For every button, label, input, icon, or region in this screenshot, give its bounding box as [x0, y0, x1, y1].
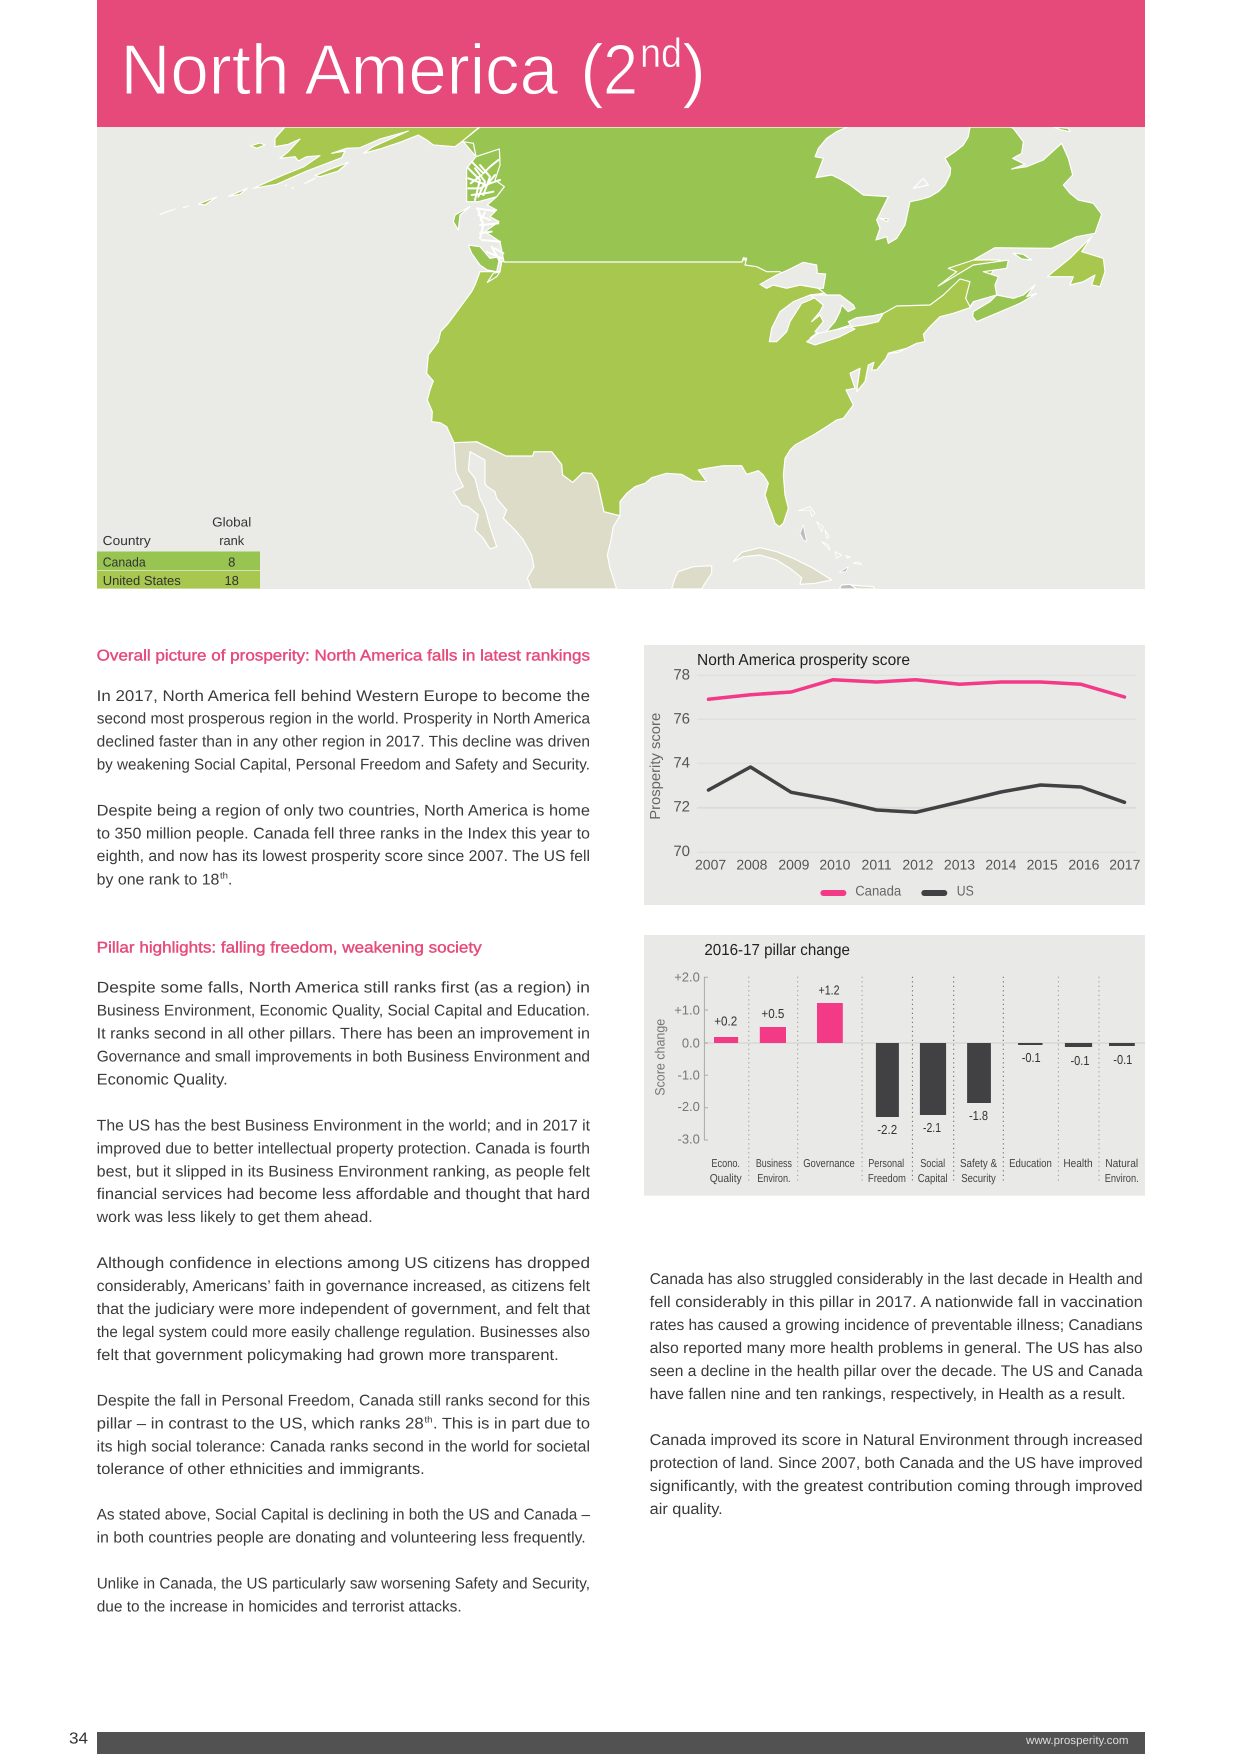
text block: personal freedom: tolerance of other ethnicities and immigrants.	[97, 1461, 425, 1478]
footer bar	[97, 1732, 1145, 1754]
x axis labels: 2012	[902, 856, 934, 872]
map: Yucatan	[672, 566, 712, 589]
text block: pillar highlights: It ranks second in all other pillars. There has been an improvement in	[97, 1026, 590, 1042]
map: Hispaniola west	[839, 584, 857, 589]
text block: governance: felt that government policymaking had grown more transparent.	[97, 1347, 559, 1364]
text block: natural environment	[650, 1432, 1143, 1518]
text block: overall picture: by weakening Social Capital, Personal Freedom and Safety and Security.	[97, 756, 590, 773]
map: Newfoundland	[1047, 237, 1105, 287]
x axis labels: 2017	[1109, 856, 1141, 872]
line: US	[708, 767, 1124, 812]
x axis labels: 2009	[778, 856, 810, 872]
x axis labels	[695, 856, 1141, 872]
y axis labels: 76	[673, 710, 690, 727]
map: Anticosti Island	[1013, 253, 1032, 260]
ranking table	[97, 515, 260, 588]
category labels: Health	[1063, 1158, 1093, 1170]
map: Canada	[461, 127, 1102, 338]
y axis: +1.0	[674, 1003, 700, 1018]
value labels: -0.1	[1113, 1052, 1132, 1067]
map: Alaska panhandle and fjords	[453, 142, 504, 282]
y axis labels: 70	[673, 843, 690, 860]
text block: pillar highlights: best, but it slipped in its Business Environment ranking, as people felt	[97, 1163, 591, 1180]
panel: pillar change bar chart	[644, 935, 1145, 1196]
ranking table: 8	[228, 555, 235, 570]
map: Cuba	[733, 548, 832, 584]
y axis: -3.0	[677, 1132, 700, 1147]
category labels: Safety &	[960, 1158, 997, 1170]
text block: personal freedom	[97, 1392, 590, 1478]
text block: personal freedom: . This is in part due to	[433, 1416, 590, 1432]
text block: pillar highlights: Despite some falls, North America still ranks first (as a region) in	[97, 980, 590, 997]
ranking table: Canada	[103, 555, 146, 570]
text block: health: seen a decline in the health pillar over the decade. The US and Canada	[650, 1363, 1143, 1380]
text block: personal freedom: th	[424, 1414, 432, 1424]
bars: negative	[876, 1043, 1135, 1117]
y axis title: Prosperity score	[648, 713, 664, 820]
category labels: Governance	[803, 1158, 855, 1170]
footer bar: www.prosperity.com	[1025, 1735, 1128, 1747]
map: Baffin tip	[1053, 127, 1070, 132]
text block: pillar highlights: Economic Quality.	[97, 1072, 228, 1088]
text block: overall picture: eighth, and now has its lowest prosperity score since 2007. The US fell	[97, 848, 590, 865]
text block: natural environment: significantly, with the greatest contribution coming through improved	[650, 1478, 1143, 1495]
title: )	[682, 31, 706, 110]
map: Lake Erie	[807, 327, 855, 345]
y axis labels: 74	[673, 755, 690, 772]
map: Lake Michigan	[769, 293, 823, 342]
text block: overall picture: by one rank to 18	[97, 872, 219, 888]
text block: governance: the legal system could more easily challenge regulation. Businesses also	[97, 1324, 590, 1341]
text block: natural environment: protection of land. Since 2007, both Canada and the US have improved	[650, 1455, 1143, 1472]
text block: pillar highlights: The US has the best Business Environment in the world; and in 2017 it	[97, 1117, 591, 1134]
title banner	[97, 0, 1145, 127]
text block: governance	[97, 1255, 591, 1364]
text block: safety and security	[97, 1576, 590, 1616]
text block: overall picture: declined faster than in any other region in 2017. This decline was driven	[97, 733, 590, 750]
map: Lake Ontario	[848, 313, 883, 327]
text block: social capital: in both countries people are donating and volunteering less frequently.	[97, 1530, 586, 1546]
value labels: -1.8	[969, 1108, 988, 1123]
text block: overall picture: second most prosperous region in the world. Prosperity in North America	[97, 711, 590, 728]
category labels: Econo.	[711, 1158, 740, 1170]
y axis labels	[673, 666, 690, 860]
text block: natural environment: air quality.	[650, 1501, 723, 1518]
y axis: -2.0	[677, 1099, 700, 1114]
heading: overall picture: Overall picture of prosperity: North America falls in latest rankings	[97, 648, 590, 665]
map: Nova Scotia	[973, 285, 1037, 322]
page number: 34	[69, 1730, 88, 1748]
y axis labels: 78	[673, 666, 690, 683]
map: Hispaniola	[839, 585, 875, 589]
category labels: Environ.	[757, 1173, 791, 1185]
text block: health: Canada has also struggled considerably in the last decade in Health and	[650, 1271, 1143, 1288]
text block: health	[650, 1271, 1143, 1403]
category labels: Security	[961, 1173, 996, 1185]
category labels: Education	[1009, 1158, 1052, 1170]
y axis	[674, 970, 708, 1147]
category labels: Quality	[710, 1173, 742, 1185]
map: United States	[427, 260, 1000, 527]
ranking table: rank	[219, 533, 245, 548]
title: 2	[603, 31, 638, 110]
chart title: 2016-17 pillar change	[704, 942, 850, 959]
text block: personal freedom: Despite the fall in Personal Freedom, Canada still ranks second for this	[97, 1392, 590, 1410]
text block: health: rates has caused a growing incidence of preventable illness; Canadians	[650, 1317, 1143, 1334]
text block: social capital	[97, 1506, 590, 1546]
value labels	[714, 983, 1132, 1137]
text block: pillar highlights: work was less likely to get them ahead.	[96, 1209, 373, 1226]
panel: prosperity score line chart	[644, 645, 1145, 905]
category labels: Natural	[1105, 1158, 1138, 1170]
y axis: +2.0	[674, 970, 700, 985]
line: Canada	[708, 680, 1124, 699]
value labels: +0.5	[761, 1006, 784, 1021]
title: (	[580, 31, 604, 110]
text block: natural environment: Canada improved its score in Natural Environment through increased	[650, 1432, 1143, 1449]
value labels: -0.1	[1022, 1050, 1041, 1065]
x axis labels: 2014	[985, 856, 1017, 872]
legend: US	[957, 883, 974, 899]
text block: overall picture: Despite being a region of only two countries, North America is home	[97, 802, 590, 819]
category labels: Environ.	[1105, 1173, 1139, 1185]
text block: pillar highlights: improved due to better intellectual property protection. Canada is fourth	[97, 1140, 590, 1157]
text block: overall picture: In 2017, North America fell behind Western Europe to become the	[97, 688, 590, 705]
y axis labels: 72	[673, 799, 690, 816]
x axis labels: 2015	[1027, 856, 1058, 872]
map: Alaska	[160, 127, 479, 214]
x axis labels: 2007	[695, 856, 726, 872]
category labels	[710, 1158, 1139, 1185]
text block: health: fell considerably in this pillar in 2017. A nationwide fall in vaccination	[650, 1294, 1143, 1311]
map: Hudson Bay islands	[913, 178, 928, 188]
map: Bahamas	[798, 507, 862, 572]
legend	[820, 883, 974, 899]
text block: overall picture: .	[228, 872, 232, 888]
map: Long Island	[888, 348, 907, 353]
text block: pillar highlights: Business Environment, Economic Quality, Social Capital and Education.	[97, 1002, 590, 1020]
value labels: +0.2	[714, 1014, 737, 1029]
text block: personal freedom: pillar – in contrast to the US, which ranks 28	[97, 1416, 424, 1432]
title: North America	[120, 31, 558, 110]
y axis: -1.0	[677, 1068, 700, 1083]
text block: pillar highlights: Governance and small improvements in both Business Environment and	[97, 1048, 590, 1066]
x axis labels: 2013	[944, 856, 975, 872]
value labels: -0.1	[1070, 1053, 1090, 1068]
title: nd	[640, 30, 682, 76]
bars: positive	[714, 1003, 843, 1043]
heading: pillar highlights: Pillar highlights: falling freedom, weakening society	[97, 940, 482, 957]
x axis labels: 2010	[819, 856, 851, 872]
text block: overall picture: to 350 million people. Canada fell three ranks in the Index this year to	[97, 825, 590, 842]
text block: pillar highlights: financial services had become less affordable and thought that hard	[97, 1186, 590, 1203]
text block: social capital: As stated above, Social Capital is declining in both the US and Canada –	[97, 1506, 590, 1524]
value labels: -2.1	[923, 1120, 941, 1135]
legend: Canada	[855, 883, 901, 899]
value labels: -2.2	[877, 1122, 897, 1137]
map: Lake Superior	[760, 262, 826, 288]
value labels: +1.2	[818, 983, 840, 998]
map: Mexico	[453, 442, 620, 589]
text block: pillar highlights	[96, 980, 591, 1226]
category labels: Business	[756, 1158, 792, 1170]
category labels: Personal	[868, 1158, 904, 1170]
text block: safety and security: Unlike in Canada, the US particularly saw worsening Safety and Security,	[97, 1576, 590, 1592]
y axis: 0.0	[682, 1035, 700, 1050]
x axis labels: 2008	[736, 856, 768, 872]
text block: overall picture: th	[220, 870, 228, 880]
text block: governance: considerably, Americans’ faith in governance increased, as citizens felt	[97, 1278, 591, 1295]
ranking table: United States	[103, 573, 181, 588]
text block: governance: that the judiciary were more independent of government, and felt that	[97, 1301, 591, 1318]
map panel	[97, 127, 1145, 589]
chart title: North America prosperity score	[697, 652, 910, 669]
y axis title: Score change	[652, 1019, 667, 1096]
category labels: Capital	[918, 1173, 948, 1185]
ranking table: Global	[212, 515, 251, 530]
text block: safety and security: due to the increase in homicides and terrorist attacks.	[97, 1598, 462, 1616]
x axis labels: 2016	[1068, 856, 1100, 872]
text block: health: have fallen nine and ten rankings, respectively, in Health as a result.	[650, 1386, 1126, 1403]
map: Lake Huron	[810, 295, 855, 335]
category labels: Social	[920, 1158, 945, 1170]
category labels: Freedom	[868, 1173, 906, 1185]
text block: personal freedom: its high social tolerance: Canada ranks second in the world for societal	[97, 1438, 590, 1456]
x axis labels: 2011	[862, 856, 892, 872]
text block: overall picture	[97, 688, 590, 888]
text block: governance: Although confidence in elections among US citizens has dropped	[97, 1255, 590, 1272]
ranking table: Country	[103, 533, 151, 548]
ranking table: 18	[224, 573, 239, 588]
text block: health: also reported many more health problems in general. The US has also	[650, 1340, 1143, 1357]
